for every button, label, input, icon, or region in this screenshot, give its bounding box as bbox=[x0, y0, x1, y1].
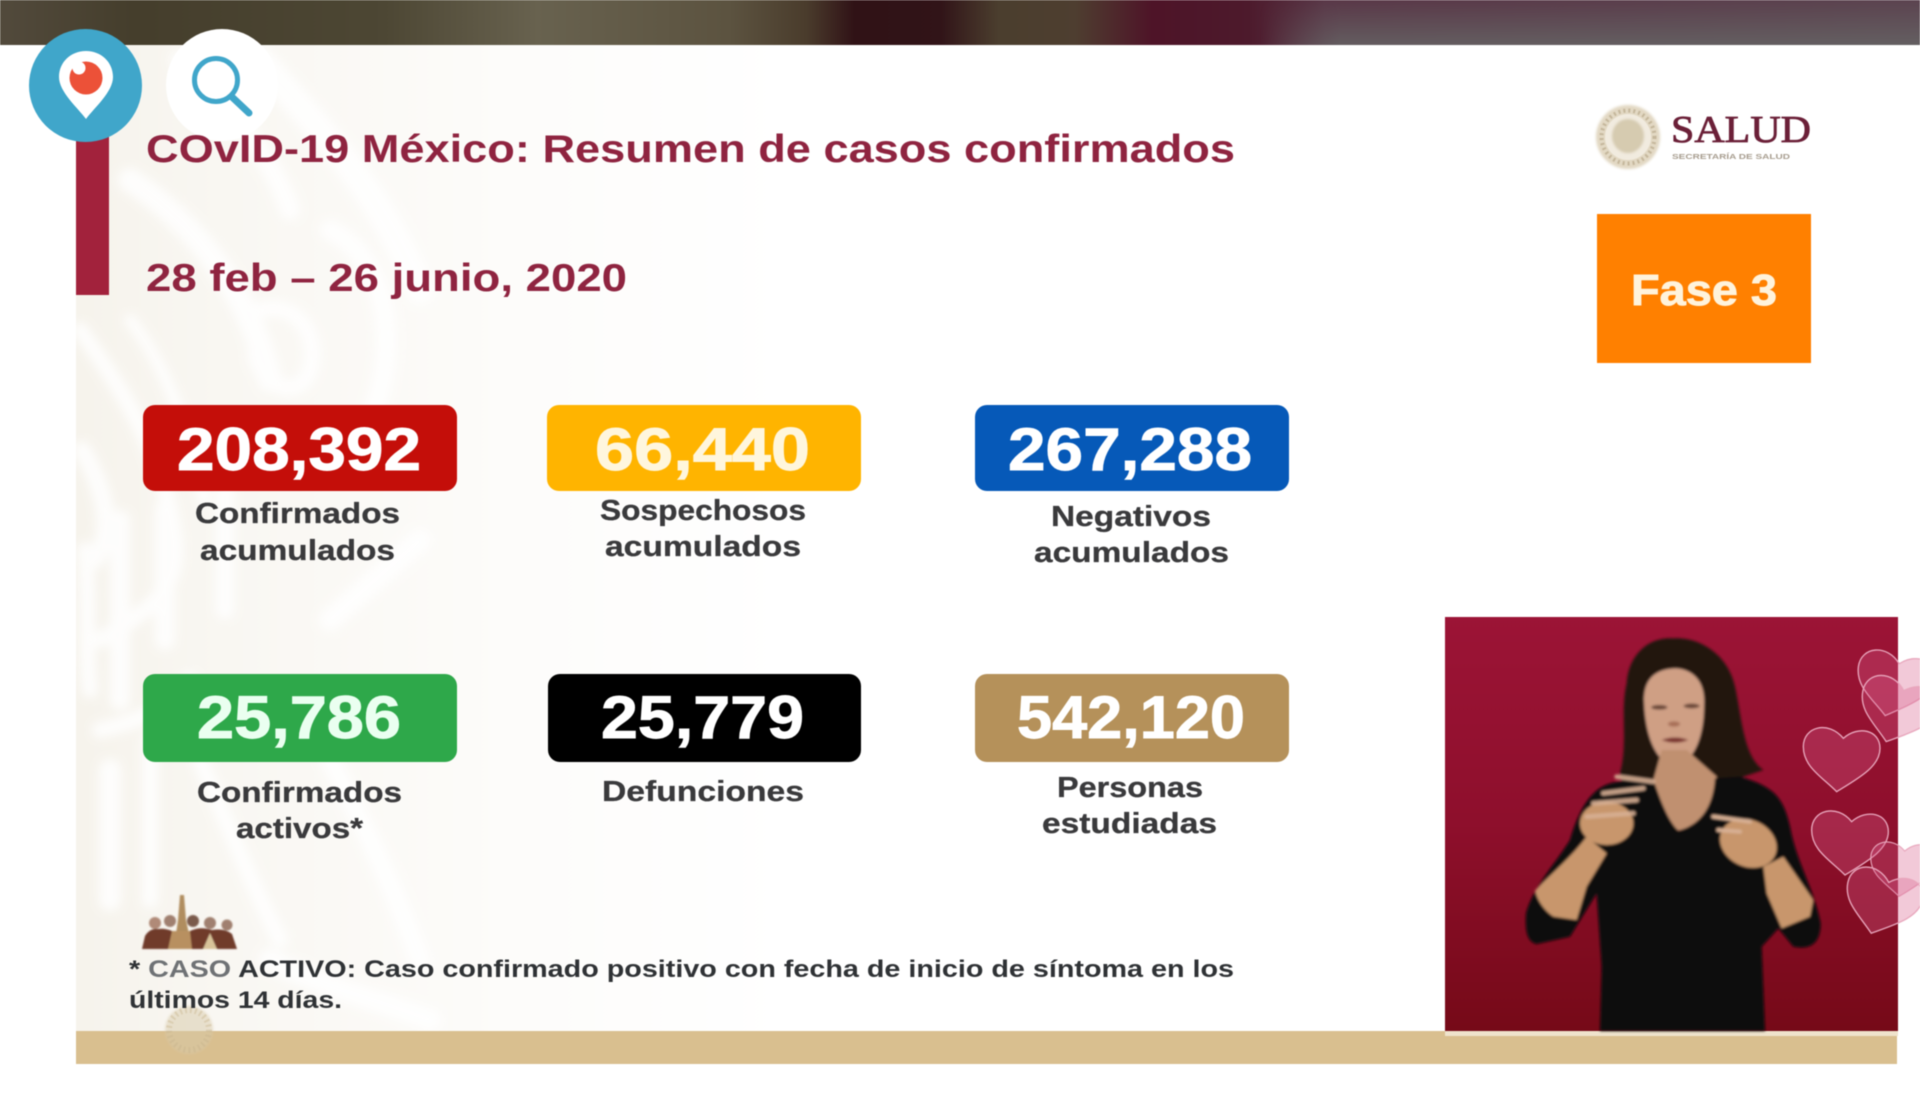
stat card: defunciones: Defunciones bbox=[602, 776, 804, 808]
stat card: confirmados acumulados bbox=[143, 405, 457, 567]
stat card: negativos acumulados: 267,288 bbox=[1008, 416, 1252, 483]
illustration: historical figures bbox=[142, 895, 237, 949]
stat card: confirmados acumulados: 208,392 bbox=[177, 416, 421, 483]
footnote: últimos 14 días. bbox=[129, 987, 342, 1014]
stat card: negativos acumulados bbox=[975, 405, 1289, 569]
interpreter figure bbox=[1526, 638, 1821, 1031]
footnote: * CASO ACTIVO: Caso confirmado positivo con fecha de inicio de síntoma en los bbox=[129, 956, 1234, 983]
stat card: sospechosos acumulados: acumulados bbox=[605, 531, 801, 563]
slide background with watermark pattern bbox=[76, 45, 1476, 1031]
date range: 28 feb – 26 junio, 2020 bbox=[146, 257, 627, 300]
icon: periscope pin bbox=[29, 29, 142, 142]
phase badge: Fase 3 bbox=[1597, 214, 1811, 363]
stat card: defunciones bbox=[548, 674, 861, 808]
accent bar bbox=[76, 120, 109, 295]
logo: Secretaría de Salud bbox=[1596, 105, 1811, 169]
logo: Secretaría de Salud: SALUD bbox=[1671, 109, 1811, 151]
stat card: negativos acumulados: Negativos bbox=[1051, 501, 1211, 533]
floating hearts bbox=[1803, 648, 1920, 942]
small emblem over footer bbox=[165, 1006, 213, 1054]
stat card: personas estudiadas: Personas bbox=[1057, 772, 1203, 804]
stat card: personas estudiadas: estudiadas bbox=[1042, 808, 1217, 840]
icon: search magnifier bbox=[166, 29, 278, 141]
footer band bbox=[76, 1031, 1897, 1064]
top video strip bbox=[0, 0, 1920, 45]
stat card: personas estudiadas: 542,120 bbox=[1017, 684, 1245, 751]
phase badge: Fase 3: Fase 3 bbox=[1631, 266, 1777, 315]
stat card: confirmados acumulados: Confirmados bbox=[195, 498, 400, 530]
stat card: defunciones: 25,779 bbox=[601, 684, 804, 751]
stat card: negativos acumulados: acumulados bbox=[1034, 537, 1229, 569]
stat card: confirmados acumulados: acumulados bbox=[200, 535, 395, 567]
title: COvID-19 México: Resumen de casos confirmados bbox=[146, 128, 1235, 171]
logo: Secretaría de Salud: SECRETARÍA DE SALUD bbox=[1672, 152, 1791, 161]
footnote bbox=[129, 956, 1234, 1014]
stat card: confirmados activos: Confirmados bbox=[197, 777, 402, 809]
stat card: confirmados activos: activos* bbox=[236, 813, 364, 845]
stat card: personas estudiadas bbox=[975, 674, 1289, 840]
stat card: confirmados activos: 25,786 bbox=[197, 684, 401, 751]
stat card: sospechosos acumulados: Sospechosos bbox=[600, 495, 806, 527]
stat card: sospechosos acumulados bbox=[547, 405, 861, 563]
sign language interpreter video panel bbox=[1445, 617, 1898, 1036]
stat card: sospechosos acumulados: 66,440 bbox=[595, 416, 810, 483]
stat card: confirmados activos bbox=[143, 674, 457, 845]
